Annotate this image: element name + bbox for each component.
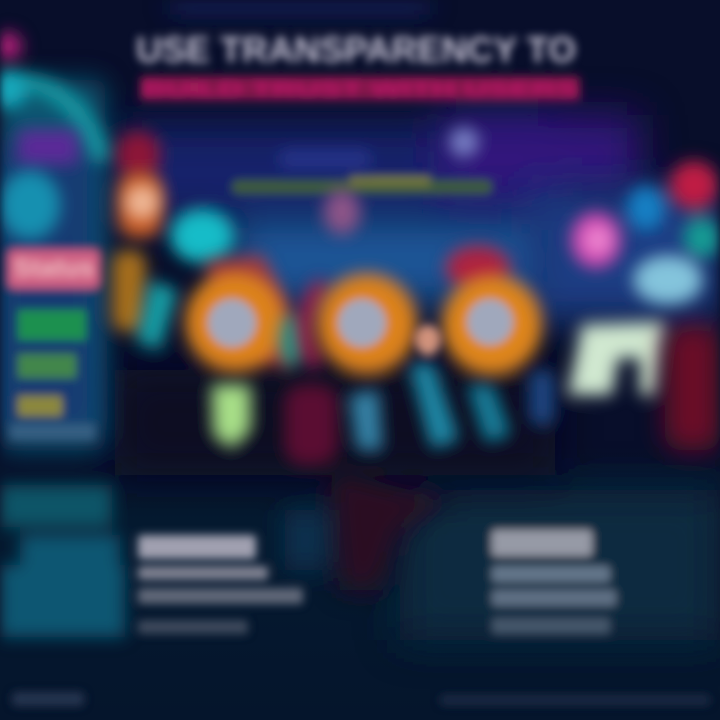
chart: ring one [185,255,304,372]
stems below rings [212,362,554,465]
subtitle [140,76,580,101]
icon: red and orange flame stack [112,131,162,332]
background [115,0,720,640]
right maroon shape [665,325,720,450]
list: green rows [10,310,95,440]
dotted yellow-green chart label [232,176,492,194]
footer text left [12,692,84,706]
dark maroon shape [285,470,450,590]
small pink and white accents [280,128,478,234]
chart: ring three [442,246,542,375]
icon: cyan bubble [136,209,234,350]
group: right bubbles [572,161,720,304]
button: pink label [8,250,100,288]
panel: left column [0,32,105,450]
subtitle: BUILD TRUST WITH USERS [142,78,578,101]
icon: pale bar cluster [568,322,665,395]
chart: ring two [305,274,417,374]
text block: left stat [138,535,303,634]
panel: lower left teal block [0,485,125,637]
footer text right [440,695,710,705]
button: pink label: Status [14,255,94,282]
text block: right stat [492,530,616,634]
connector between rings [416,325,440,355]
title: USE TRANSPARENCY TO [136,29,576,70]
